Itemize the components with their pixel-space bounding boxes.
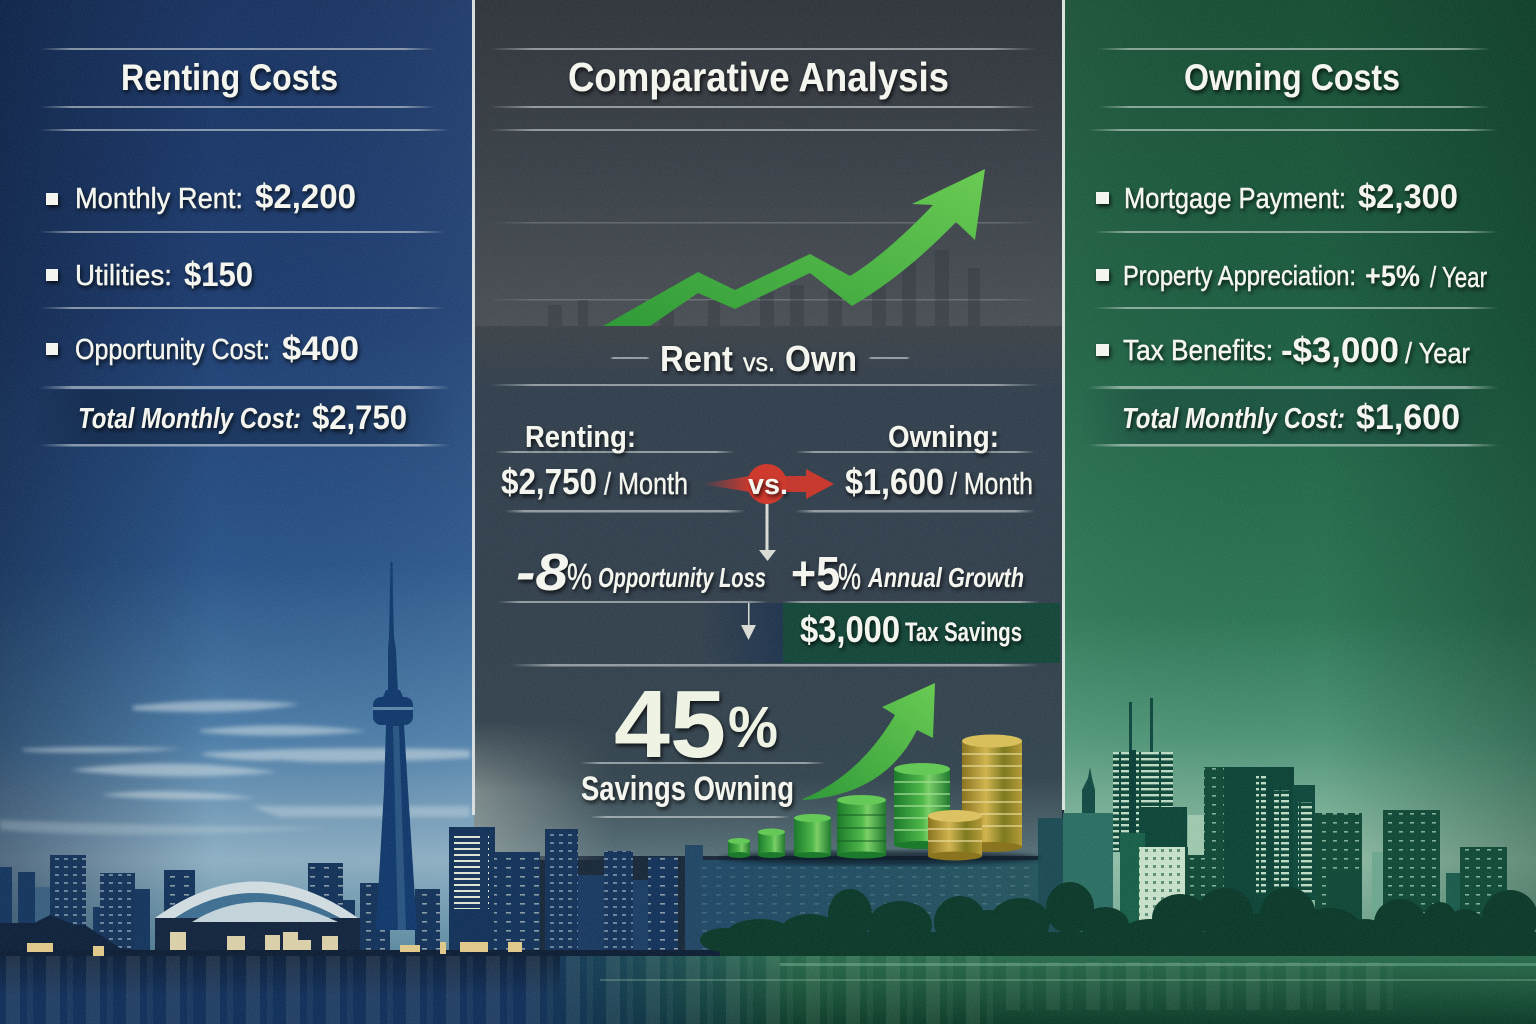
stat: 45 percent savings: Savings Owning — [581, 770, 794, 808]
water reflection — [0, 956, 1536, 1024]
comparison: renting: $2,750 — [501, 461, 597, 502]
panel: owning background — [1064, 0, 1536, 1024]
row: mortgage payment: $2,300 — [1358, 178, 1458, 216]
stat: tax savings: Tax Savings — [905, 617, 1022, 647]
stat: tax savings: $3,000 — [800, 609, 900, 650]
skyline: right city — [700, 698, 1536, 962]
stat: opportunity loss: Opportunity Loss — [598, 562, 766, 593]
icon: versus arrow badge: vs. — [748, 469, 788, 501]
panel: comparative analysis background — [474, 0, 1062, 860]
stat: annual growth: Annual Growth — [867, 562, 1024, 593]
green stack 3 — [794, 814, 831, 858]
icon: small down arrow — [741, 603, 756, 640]
comparison: owning: Owning: — [888, 419, 999, 454]
row: monthly rent: Monthly Rent: — [75, 183, 243, 215]
icon: green savings arrow — [803, 683, 935, 800]
row: monthly rent — [46, 178, 356, 216]
row: property appreciation: +5% — [1365, 260, 1420, 293]
comparison: renting — [501, 419, 688, 502]
row: monthly rent: $2,200 — [255, 178, 356, 216]
icon: stadium dome — [155, 882, 360, 956]
row: total monthly cost: Total Monthly Cost: — [78, 403, 301, 435]
comparison: renting: Renting: — [525, 419, 636, 454]
comparison: owning — [845, 419, 1033, 502]
row: total monthly cost: Total Monthly Cost: — [1122, 403, 1345, 435]
gold stack tall — [962, 734, 1022, 852]
row: tax benefits: Tax Benefits: — [1123, 335, 1273, 367]
green stack 1 — [728, 838, 750, 858]
row: utilities: $150 — [184, 256, 253, 294]
stat: 45 percent savings — [581, 671, 794, 808]
panel: renting cost list — [46, 178, 407, 437]
stat: annual growth: % — [838, 556, 861, 597]
icon: versus arrow badge — [700, 464, 834, 504]
heading: comparative analysis: Comparative Analysis — [568, 54, 949, 100]
row: tax benefits — [1096, 331, 1470, 370]
row: opportunity cost: Opportunity Cost: — [75, 334, 270, 366]
comparison: renting: / Month — [604, 466, 688, 501]
icon: green growth arrow — [603, 169, 985, 326]
row: utilities: Utilities: — [75, 260, 172, 292]
stat: tax savings — [800, 609, 1022, 650]
row: property appreciation: Property Appreciation: — [1123, 260, 1356, 291]
green stack 4 — [837, 795, 886, 858]
stat: 45 percent savings: % — [728, 695, 778, 760]
row: utilities — [46, 256, 253, 294]
row: tax benefits: -$3,000 — [1281, 331, 1399, 370]
heading: owning costs: Owning Costs — [1184, 57, 1400, 98]
chart: faint bars behind growth arrow — [548, 250, 980, 326]
total row highlight left — [30, 390, 455, 444]
panel borders — [472, 0, 1065, 815]
heading: renting costs: Renting Costs — [121, 57, 338, 98]
trees — [700, 882, 1536, 962]
row: tax benefits: / Year — [1405, 338, 1470, 370]
row: total monthly cost: $1,600 — [1356, 398, 1460, 437]
row: mortgage payment — [1096, 178, 1458, 216]
row: total monthly cost — [78, 399, 407, 437]
stat: annual growth: +5 — [791, 548, 840, 601]
panel: owning cost list — [1096, 178, 1487, 437]
stat: 45 percent savings: 45 — [614, 671, 726, 778]
stat: annual growth — [791, 548, 1024, 601]
stat: opportunity loss — [516, 544, 766, 602]
row: opportunity cost: $400 — [282, 330, 359, 368]
green stack 2 — [758, 828, 785, 858]
icon: down arrow from versus badge — [759, 503, 776, 561]
heading: rent vs own: Own — [785, 338, 857, 379]
panel: renting background — [0, 0, 474, 1024]
stat: opportunity loss: % — [567, 556, 592, 597]
row: opportunity cost — [46, 330, 359, 368]
heading: rent vs own — [660, 338, 857, 379]
gold stack short — [928, 810, 982, 860]
stat: opportunity loss: -8 — [516, 544, 568, 602]
comparison: owning: / Month — [950, 466, 1033, 501]
comparison: owning: $1,600 — [845, 461, 944, 502]
row: total monthly cost — [1122, 398, 1460, 437]
skyline: left city with tower and stadium — [0, 562, 1078, 960]
icon: CN tower — [373, 562, 417, 930]
icon: coin stacks — [720, 734, 1040, 865]
green stack 5 — [894, 763, 950, 849]
row: total monthly cost: $2,750 — [312, 399, 407, 437]
row: property appreciation — [1096, 260, 1487, 294]
heading: rent vs own: Rent — [660, 338, 733, 379]
total row highlight right — [1078, 390, 1503, 444]
row: property appreciation: / Year — [1430, 262, 1487, 294]
row: mortgage payment: Mortgage Payment: — [1124, 183, 1346, 215]
heading: rent vs own: vs. — [743, 347, 775, 377]
